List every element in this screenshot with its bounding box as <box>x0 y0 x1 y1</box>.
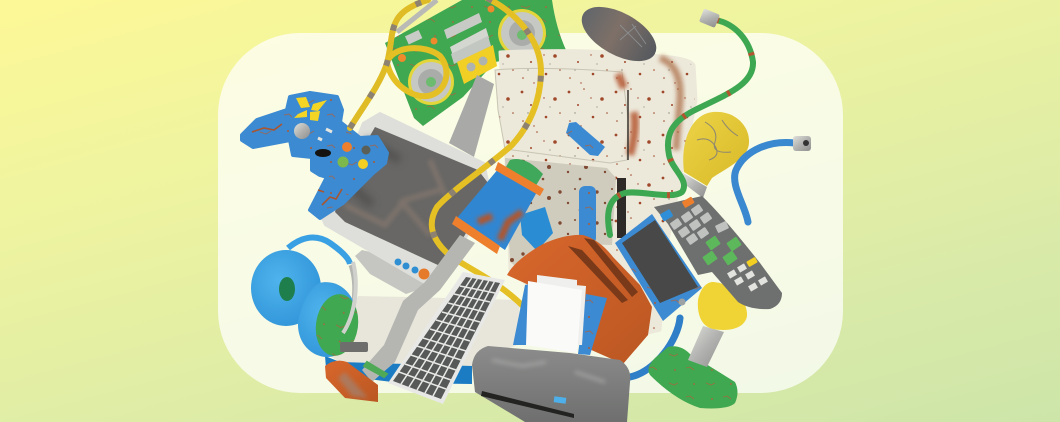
joystick ball <box>698 282 747 330</box>
phone screen <box>622 220 698 303</box>
fridge <box>495 51 696 345</box>
yellow lightbulb <box>683 112 749 198</box>
monitor screen <box>335 127 492 266</box>
silver monitor stand post <box>449 75 494 157</box>
printer slot <box>481 391 574 418</box>
monitor stand foot <box>355 250 432 294</box>
fridge upper door <box>495 68 628 163</box>
yellow cable <box>350 0 541 308</box>
gun top ring <box>495 162 544 196</box>
gun handle <box>520 207 553 251</box>
toaster slots <box>568 238 638 303</box>
toaster <box>507 235 652 364</box>
back papers <box>537 275 586 345</box>
headphones <box>251 238 368 359</box>
joystick base <box>648 346 738 408</box>
printer indicator <box>554 396 566 404</box>
front paper <box>526 281 582 353</box>
joystick stick <box>688 326 724 367</box>
orange tube nozzle <box>325 361 378 402</box>
remote small white buttons <box>727 263 768 292</box>
face buttons <box>338 142 370 169</box>
computer monitor <box>320 113 492 294</box>
remote control <box>654 196 782 309</box>
right blue page <box>578 294 607 355</box>
paper stack with blue tray <box>513 275 607 355</box>
blue cable metal plug <box>793 136 811 151</box>
rock <box>573 0 665 72</box>
blue cable <box>630 136 811 377</box>
left blue page <box>513 284 530 345</box>
right ear cup <box>298 282 362 359</box>
gun bottom ring <box>452 216 500 254</box>
white box at base <box>330 296 520 370</box>
tablet phone <box>615 214 702 321</box>
rounded translucent white panel <box>218 33 843 393</box>
boombox controls <box>398 6 497 84</box>
water gun <box>452 159 553 254</box>
monitor buttons <box>394 258 430 280</box>
boombox left speaker <box>408 59 454 105</box>
monitor shell <box>320 113 490 287</box>
fridge body <box>500 51 696 345</box>
fridge handle upper <box>566 122 605 156</box>
green cable metal plug <box>699 9 720 28</box>
d-pad <box>294 97 327 121</box>
analog stick <box>294 123 310 139</box>
keyboard <box>388 272 505 404</box>
headphone band <box>288 238 350 264</box>
gun green cap <box>503 159 543 192</box>
game controller <box>242 93 387 218</box>
gun barrel <box>457 168 538 250</box>
vacuum tube <box>325 235 475 402</box>
boombox <box>385 0 566 126</box>
remote coloured buttons <box>660 197 758 267</box>
boombox right speaker <box>498 9 546 57</box>
fridge handle lower <box>579 186 596 244</box>
fridge lower door <box>505 158 616 268</box>
joystick <box>648 282 747 408</box>
blue base strip <box>325 356 472 384</box>
green cable <box>608 9 753 235</box>
remote grey buttons <box>670 204 729 245</box>
printer <box>472 346 630 422</box>
left ear cup <box>251 250 321 326</box>
green tube band <box>364 362 387 377</box>
